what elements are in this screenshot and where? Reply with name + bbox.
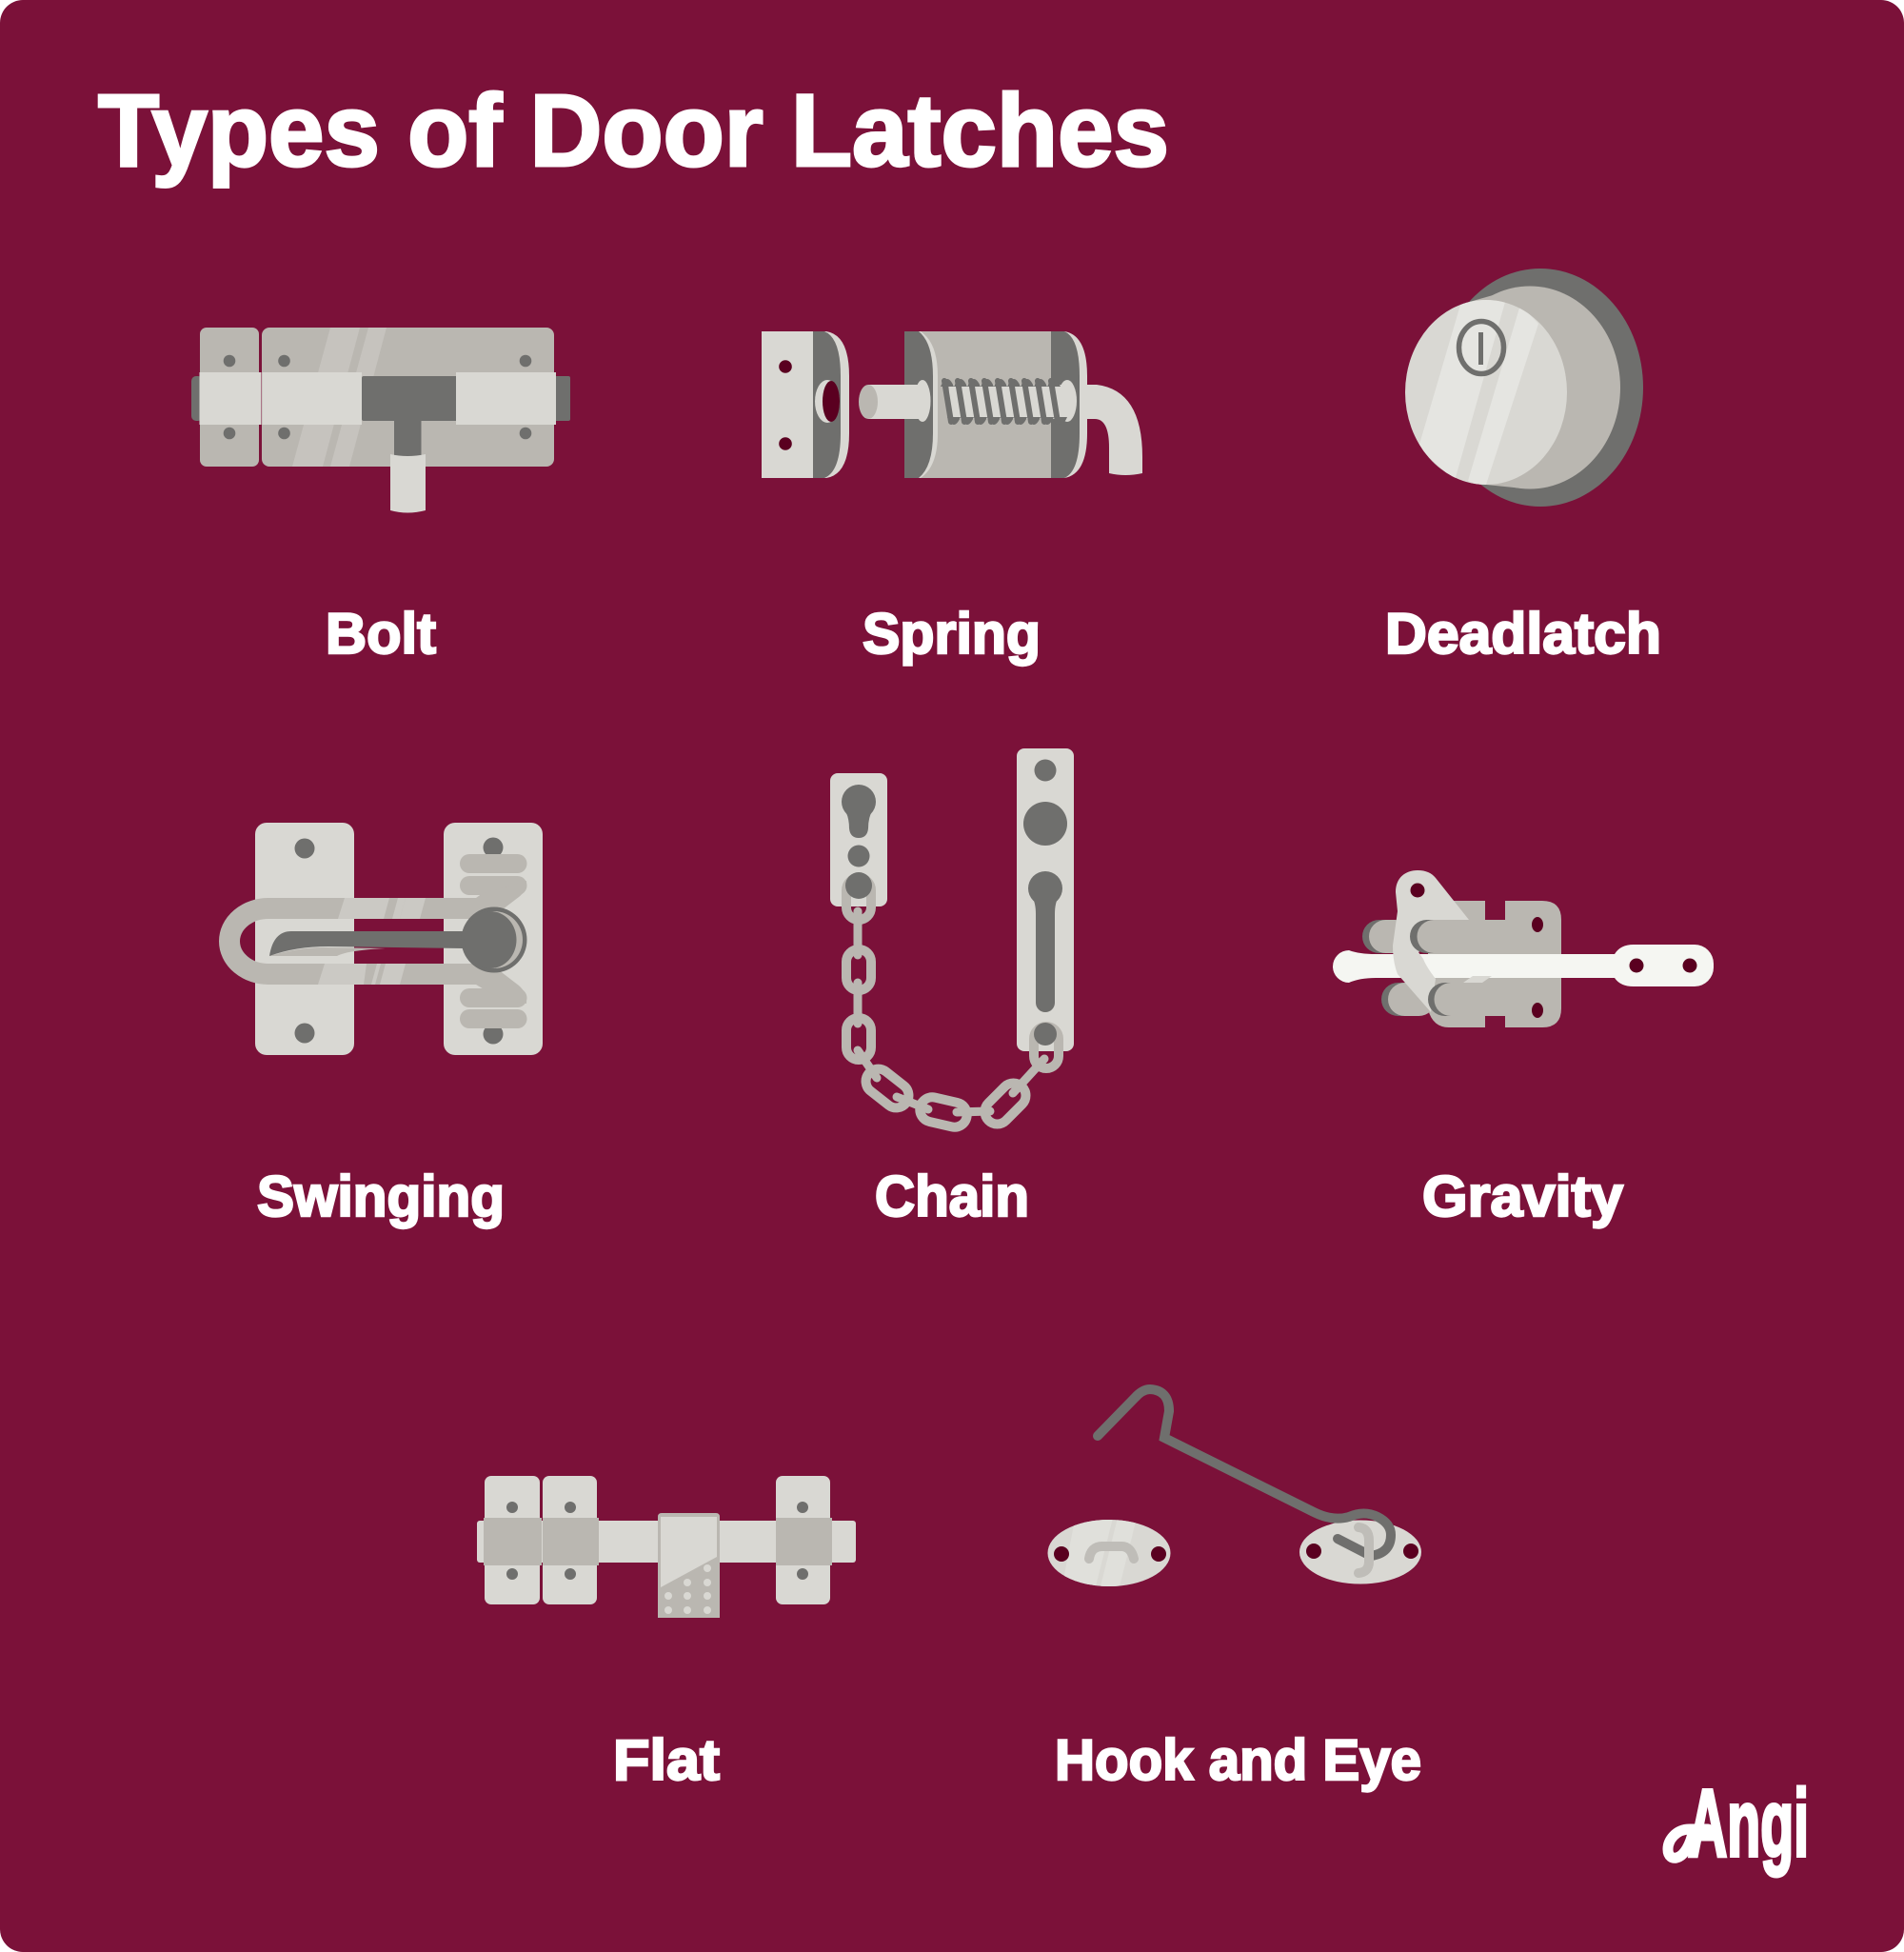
label: Hook and Eye: Hook and Eye: [1055, 1728, 1421, 1792]
panel: flat latch: [477, 1476, 856, 1792]
panel: swinging latch: [229, 823, 543, 1228]
panel: gravity latch: [1333, 870, 1714, 1228]
panel: deadlatch: [1385, 269, 1661, 666]
panel: bolt latch: [191, 328, 570, 666]
label: Flat: Flat: [613, 1728, 720, 1792]
icon: bolt latch: [191, 328, 570, 512]
label: Deadlatch: Deadlatch: [1385, 602, 1661, 666]
label: Swinging: Swinging: [257, 1165, 505, 1228]
title: Types of Door Latches: [98, 72, 1169, 188]
icon: spring latch: [762, 331, 1142, 478]
label: Spring: Spring: [863, 602, 1041, 666]
icon: swinging latch: [229, 823, 543, 1055]
icon: deadlatch knob: [1405, 269, 1643, 507]
label: Bolt: Bolt: [326, 602, 436, 666]
panel: chain latch: [830, 748, 1074, 1228]
label: Chain: Chain: [875, 1165, 1029, 1228]
icon: hook and eye latch: [1047, 1389, 1421, 1590]
icon: chain latch: [830, 748, 1074, 1129]
logo: Angi: [1668, 1770, 1809, 1877]
label: Gravity: Gravity: [1422, 1165, 1624, 1228]
icon: flat latch: [477, 1476, 856, 1618]
panel: hook and eye latch: [1047, 1389, 1421, 1792]
logo: Angi: Angi: [1688, 1770, 1809, 1877]
panel: spring latch: [762, 331, 1142, 666]
icon: gravity latch: [1333, 870, 1714, 1027]
